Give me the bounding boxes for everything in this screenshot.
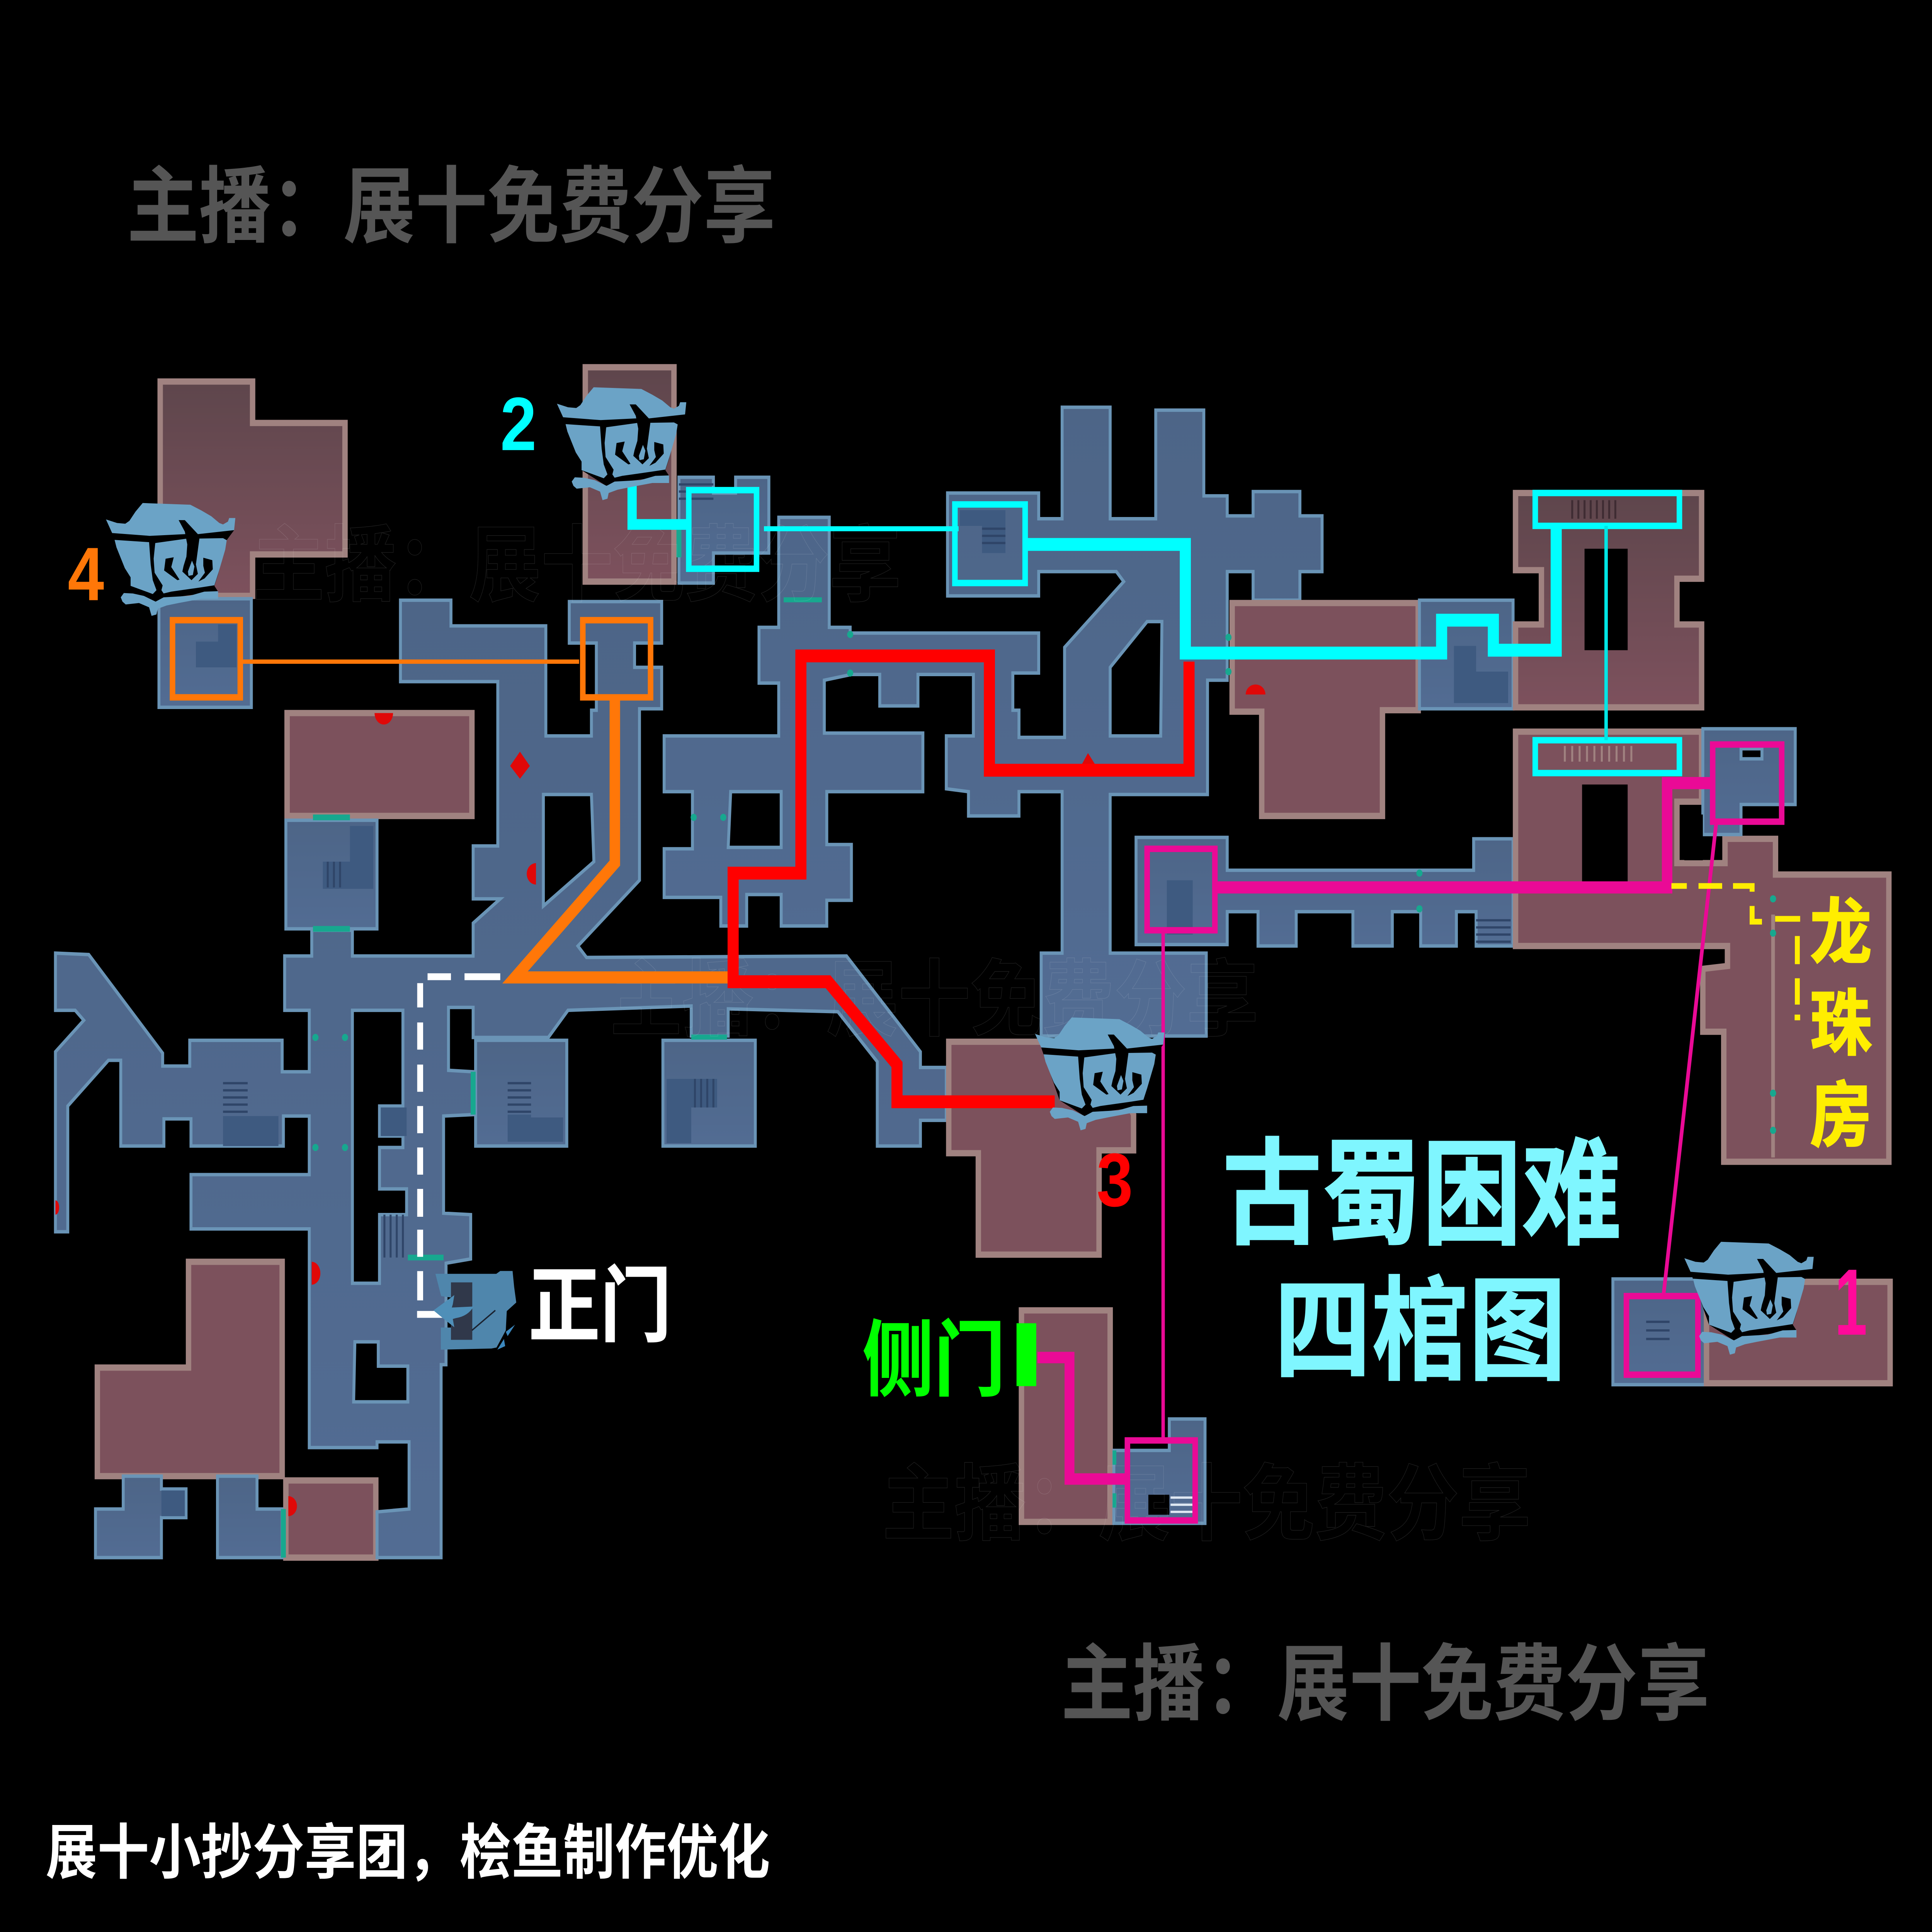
route: orange boss 4 <box>172 620 730 978</box>
room: upper right blue room <box>1703 729 1795 835</box>
corridor: south-west stub two <box>218 1476 282 1558</box>
label: dragon pearl room: 珠 <box>1810 984 1872 1064</box>
watermark: faint outline over south corridor: 主播：展十免费分享 <box>610 953 1259 1047</box>
title: map name line one: 古蜀困难 <box>1222 1130 1621 1260</box>
map: centre and east <box>664 407 1890 1523</box>
room: stair room near marker 2 <box>679 477 769 583</box>
room: red upper east hall <box>1515 493 1702 707</box>
corridor block: dark steps <box>381 1107 406 1136</box>
stairs near main gate <box>384 1214 403 1257</box>
watermark: faint outline over side gate hall: 主播：展十免费分享 <box>882 1458 1531 1551</box>
room: red chamber marker 3 <box>949 1042 1134 1255</box>
corridor: south-west stubs <box>95 1476 186 1558</box>
label: dragon pearl room <box>1810 893 1872 1156</box>
watermark: faint outline over west rooms: 主播：展十免费分享 <box>253 519 901 612</box>
stairs in south east wing <box>1167 880 1510 942</box>
room: red small south chamber <box>286 1480 376 1558</box>
icon: main gate <box>434 1271 516 1350</box>
corridor: south east wing <box>1136 837 1513 946</box>
room: south stair room <box>476 1040 567 1146</box>
icon: lantern marker 2 <box>557 387 686 500</box>
hole: lower east hall opening <box>1582 784 1628 882</box>
label: main gate: 正门 <box>529 1260 672 1352</box>
label: number 2: 2 <box>500 381 537 466</box>
room: stair room west <box>286 820 377 929</box>
icon: lantern marker 1 <box>1684 1242 1814 1355</box>
footer credit: 展十小抄分享团，桧鱼制作优化 <box>46 1819 770 1886</box>
stair grille south <box>1565 746 1631 762</box>
route: cyan boss 2 <box>632 486 1679 773</box>
room: blue stair room side gate <box>1114 1419 1205 1523</box>
room: red top chamber near marker 2 <box>585 367 674 582</box>
corridor: central network <box>664 407 1322 1036</box>
label: number 3: 3 <box>1097 1138 1133 1222</box>
stairs in upper room <box>960 510 1005 553</box>
doors: teal markers <box>281 522 1776 1558</box>
watermark: bottom right: 主播：展十免费分享 <box>1061 1638 1709 1731</box>
room: stairs in west corridor <box>223 1083 279 1146</box>
title: map name line two: 四棺图 <box>1274 1268 1566 1395</box>
route: red boss 3 <box>733 656 1189 1102</box>
label: number 4: 4 <box>68 531 104 616</box>
room: red large L chamber <box>97 1262 282 1476</box>
route: white dashed entrance path <box>417 977 500 1315</box>
room: blue stair room marker 1 <box>1613 1279 1705 1385</box>
stair grille north <box>1572 500 1615 519</box>
label: dragon pearl room: 房 <box>1810 1076 1872 1156</box>
room: red chamber marker 1 <box>1706 1282 1890 1383</box>
markers: red hazards <box>55 684 1265 1516</box>
marker: side gate bar <box>1017 1323 1036 1386</box>
map: west wing <box>55 367 946 1558</box>
room: red centre chamber <box>1232 603 1418 816</box>
block: dark stub <box>162 1490 185 1516</box>
label: side gate: 侧门 <box>862 1315 1005 1407</box>
room: red top-left chamber <box>160 381 345 596</box>
hole: upper east hall opening <box>1585 549 1628 650</box>
route: yellow dashed to dragon pearl room <box>1672 886 1800 1017</box>
icon: lantern marker 4 <box>106 503 235 616</box>
inner wall of dragon pearl room <box>1772 915 1774 1158</box>
room: red lower east hall <box>1515 731 1889 1162</box>
label: number 1: 1 <box>1835 1250 1867 1355</box>
room: blue stair room east <box>1419 600 1513 709</box>
heading: watermark top left: 主播：展十免费分享 <box>127 160 776 253</box>
room: red side gate hall <box>1021 1310 1110 1522</box>
label: dragon pearl room: 龙 <box>1810 893 1872 973</box>
room: south centre stair room <box>663 1040 755 1146</box>
room: stair room under marker 4 <box>159 599 252 707</box>
corridor: main west network <box>55 600 946 1558</box>
route: magenta boss 1 <box>1037 745 1782 1520</box>
hole: small cut in lower east hall <box>1684 815 1703 860</box>
room: red chamber upper middle <box>287 713 472 816</box>
icon: lantern marker 3 <box>1035 1017 1164 1130</box>
